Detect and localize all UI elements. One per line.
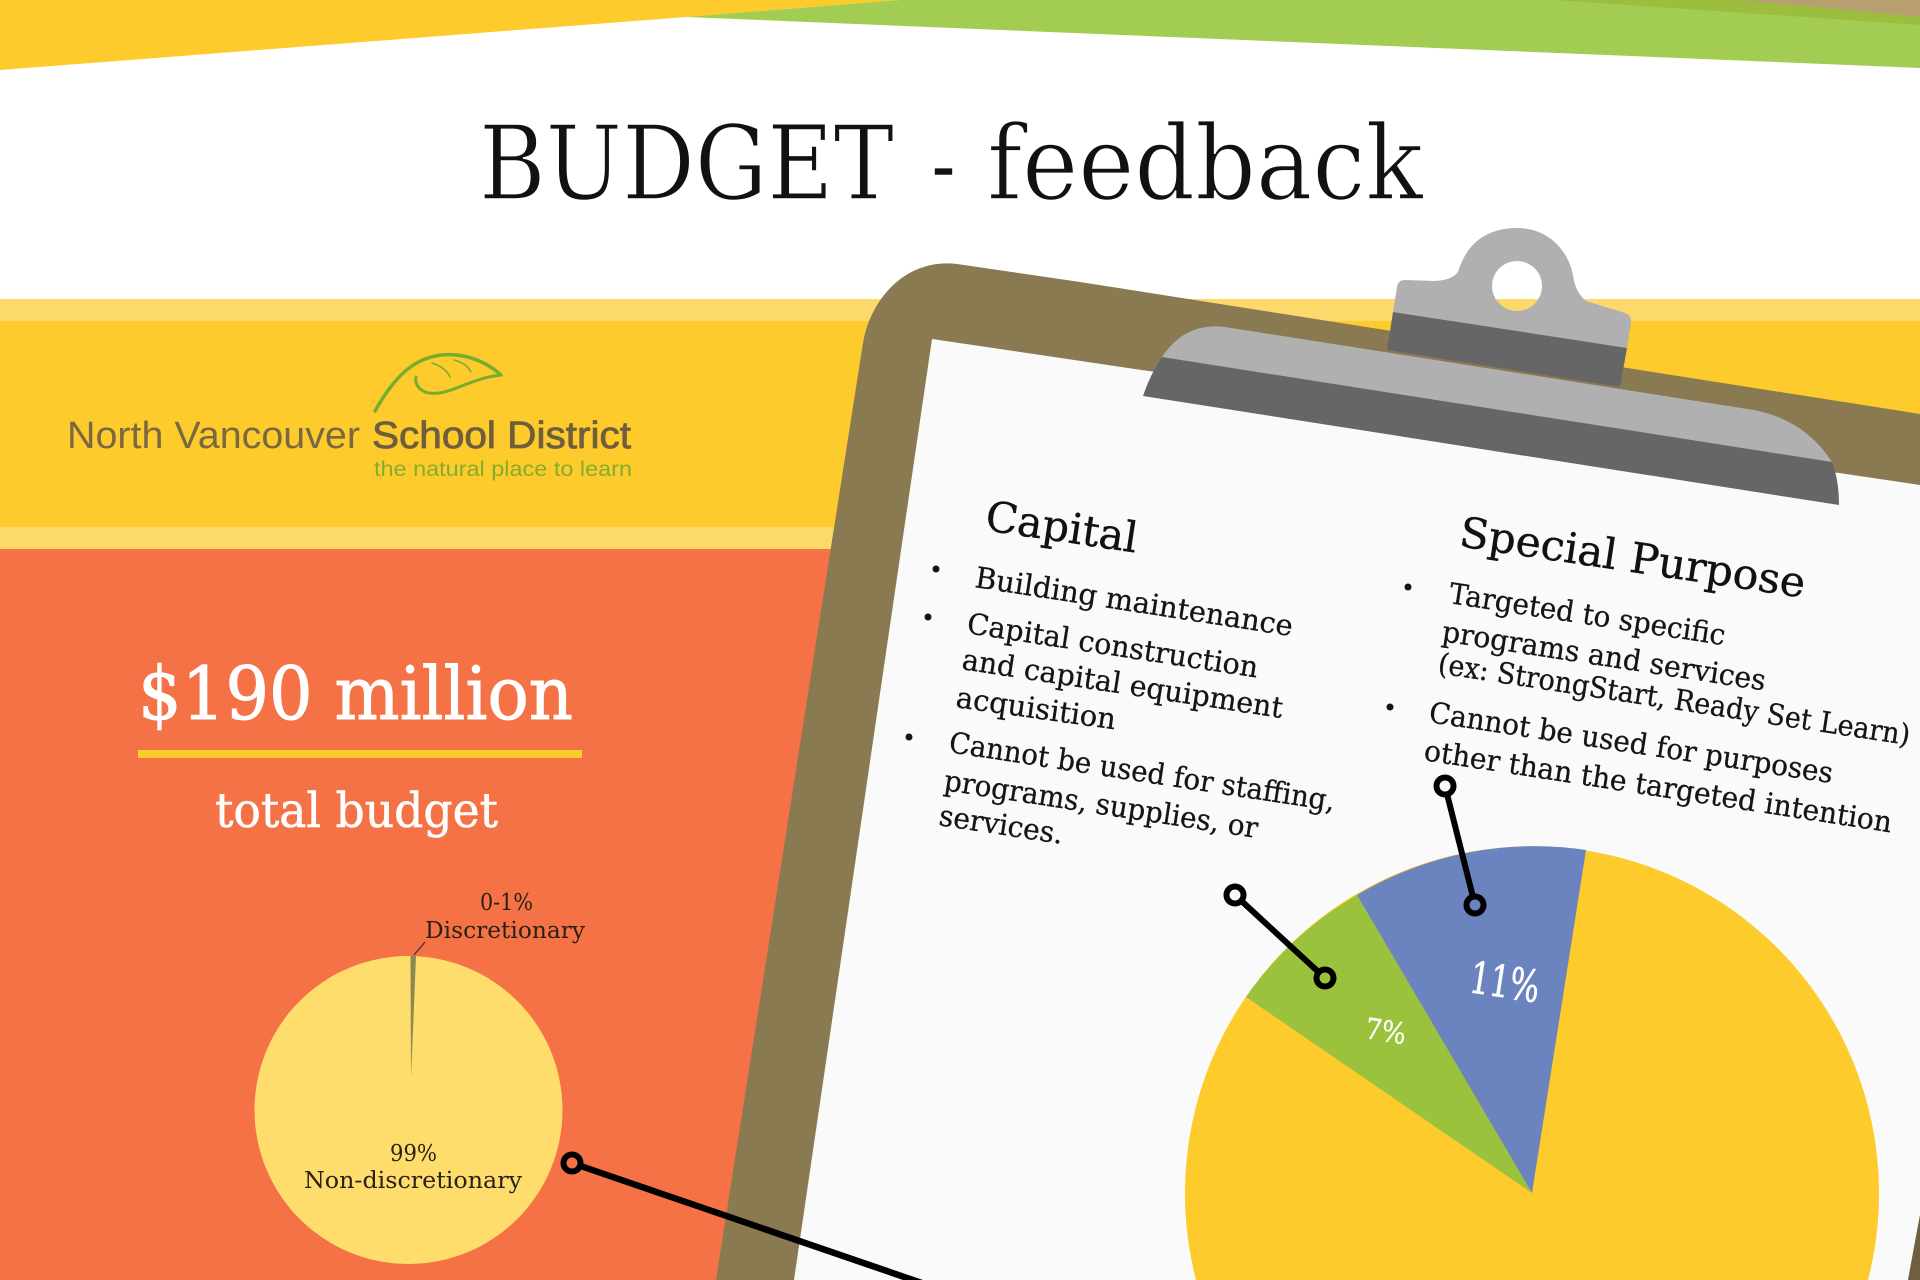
callout connector: special purpose xyxy=(1436,778,1484,914)
clipboard paper xyxy=(794,339,1920,1280)
background bands: yellow and orange xyxy=(0,299,1920,1280)
label: discretionary: Discretionary xyxy=(425,918,585,944)
logo wordmark light: North Vancouver xyxy=(67,415,360,457)
pie chart: discretionary vs non-discretionary xyxy=(254,890,585,1264)
label: non-discretionary xyxy=(304,1141,522,1194)
total budget figure xyxy=(138,652,582,839)
callout connector: capital xyxy=(1226,886,1334,986)
bullet list: capital: and capital equipment xyxy=(960,642,1286,725)
bullet list: capital: acquisition xyxy=(954,680,1118,736)
underline xyxy=(138,750,582,758)
clip body light xyxy=(1162,326,1832,462)
callout connector: non-discretionary to clipboard xyxy=(564,1154,923,1280)
label: 7%: 7% xyxy=(1363,1011,1409,1051)
bullet list: special purpose xyxy=(1386,576,1913,839)
logo: North Vancouver School District xyxy=(67,355,632,481)
pie slice: capital 7% xyxy=(1246,895,1532,1193)
label: non-discretionary: 99% xyxy=(390,1141,437,1167)
panel: capital xyxy=(906,491,1338,851)
top banner: coloured ribbons xyxy=(0,0,1920,70)
budget caption: total budget xyxy=(215,783,498,839)
bullet list: capital: Building maintenance xyxy=(973,560,1295,643)
clip tab with hole xyxy=(1393,228,1631,348)
leader line xyxy=(414,942,425,955)
label: non-discretionary: Non-discretionary xyxy=(304,1168,522,1194)
clip body dark xyxy=(1143,357,1839,505)
clipboard clip xyxy=(1143,228,1839,505)
bullet list: special purpose: other than the targeted intention xyxy=(1422,733,1895,839)
title xyxy=(479,104,1424,224)
clipboard board xyxy=(716,263,1920,1280)
bullet list: capital: Capital construction xyxy=(965,606,1261,684)
label: discretionary: 0-1% xyxy=(480,890,533,916)
bullet list: capital xyxy=(906,560,1338,851)
label: discretionary xyxy=(425,890,585,944)
panel: special purpose xyxy=(1386,507,1913,839)
board corner bottom right xyxy=(1908,1215,1920,1280)
bullet list: special purpose: Cannot be used for purposes xyxy=(1427,695,1835,790)
bullet list: capital: programs, supplies, or xyxy=(942,763,1261,845)
logo tagline: the natural place to learn xyxy=(374,458,632,481)
title: - xyxy=(931,104,956,224)
bullet list: capital: Cannot be used for staffing, xyxy=(947,725,1338,818)
bullet list: capital: services. xyxy=(937,798,1066,851)
pie slice: discretionary xyxy=(410,956,416,1078)
heading: special purpose: Special Purpose xyxy=(1457,507,1809,607)
bullet list: special purpose: Targeted to specific xyxy=(1447,576,1728,652)
heading: capital: Capital xyxy=(983,491,1141,563)
bullet list: special purpose: programs and services xyxy=(1440,614,1768,697)
budget amount: $190 million xyxy=(138,652,573,737)
label: 11%: 11% xyxy=(1466,952,1543,1013)
title: feedback xyxy=(987,104,1424,224)
title: BUDGET xyxy=(479,104,894,224)
logo wordmark bold: School District xyxy=(372,415,631,457)
pie slice: special purpose 11% xyxy=(1357,846,1586,1193)
pie chart: budget breakdown xyxy=(1185,846,1879,1280)
icon: leaf xyxy=(375,355,501,411)
